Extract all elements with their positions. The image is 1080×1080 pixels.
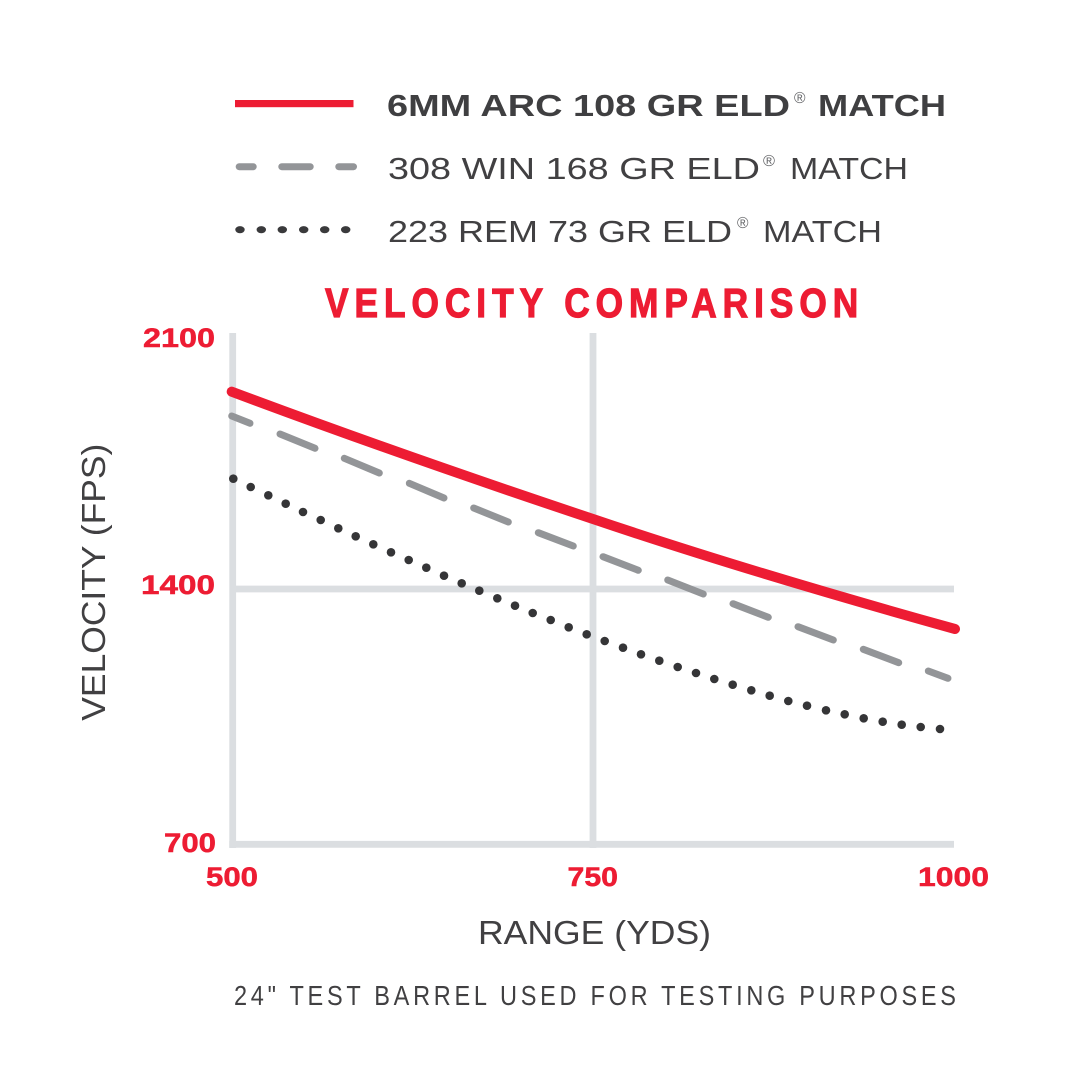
x axis labels: 1000 (918, 862, 989, 892)
legend: 308 Win: ® (763, 153, 775, 170)
y axis labels (141, 323, 216, 858)
legend (235, 88, 946, 249)
x axis labels (206, 862, 989, 892)
y axis labels: 2100 (143, 323, 215, 353)
line: 223 Rem (229, 474, 944, 733)
legend: 308 Win: MATCH (790, 151, 908, 186)
line: 6mm ARC (232, 392, 955, 629)
y axis labels: 700 (164, 828, 216, 858)
x axis title: RANGE (YDS) (478, 914, 711, 951)
legend: 223 Rem (235, 214, 882, 249)
line: 308 Win (232, 416, 948, 678)
footnote: 24" TEST BARREL USED FOR TESTING PURPOSES (234, 981, 956, 1011)
legend: 6mm ARC (235, 88, 946, 123)
legend: 308 Win: 308 WIN 168 GR ELD (388, 151, 760, 186)
legend: 223 Rem: ® (737, 215, 749, 232)
chart (229, 333, 955, 848)
legend: 223 Rem: 223 REM 73 GR ELD (388, 214, 732, 249)
legend: 6mm ARC: ® (794, 90, 806, 107)
legend: 308 Win (239, 151, 908, 186)
x axis labels: 500 (206, 862, 258, 892)
y axis labels: 1400 (141, 570, 215, 600)
y axis title: VELOCITY (FPS) (75, 444, 112, 721)
legend: 6mm ARC: MATCH (818, 88, 946, 123)
x axis labels: 750 (568, 862, 618, 892)
title: VELOCITY COMPARISON (325, 281, 858, 327)
chart grid (229, 333, 954, 848)
legend: 6mm ARC: 6MM ARC 108 GR ELD (387, 88, 790, 123)
legend: 223 Rem: MATCH (763, 214, 882, 249)
